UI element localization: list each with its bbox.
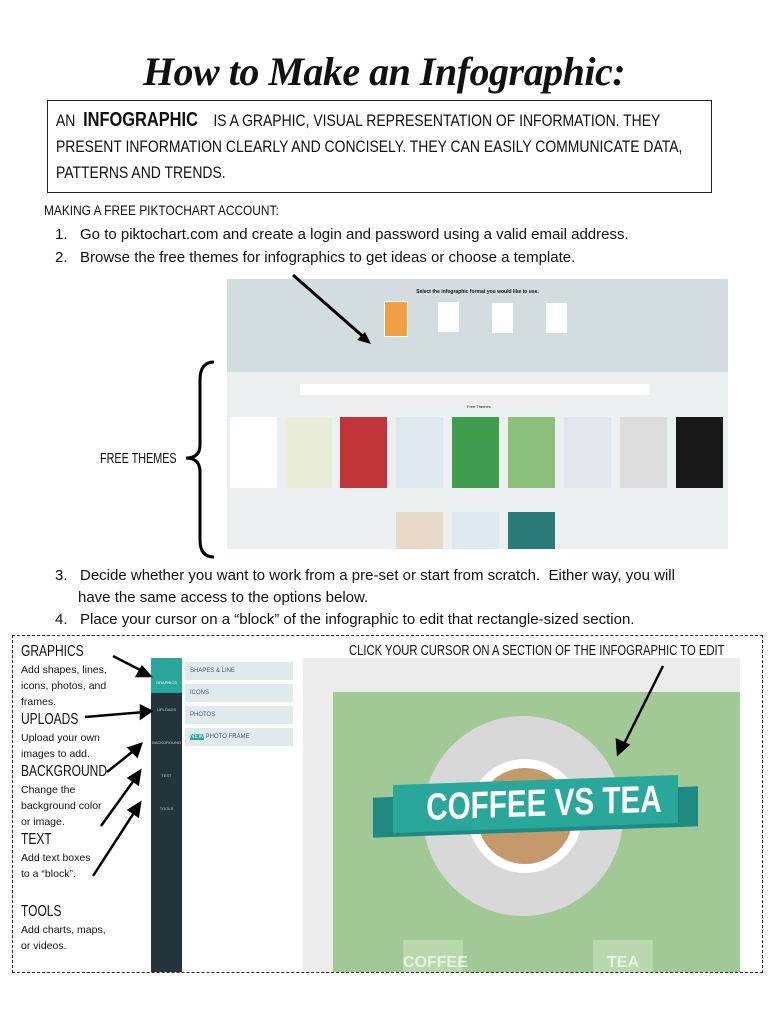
steps 3-4: 4. Place your cursor on a “block” of the infographic to edit that rectangle-sized section. — [55, 611, 634, 628]
tool descriptions: Add shapes, lines, — [21, 664, 107, 676]
arrow to infographic format — [292, 274, 371, 344]
editor canvas: TEA — [607, 954, 639, 971]
menu panel — [185, 662, 293, 746]
tool descriptions: TEXT — [21, 831, 52, 848]
menu panel: ICONS — [190, 690, 209, 696]
sidebar: TOOLS — [160, 806, 173, 811]
definition box — [47, 100, 712, 193]
menu panel: NEW PHOTO FRAME — [190, 734, 250, 740]
free themes label: FREE THEMES — [100, 450, 177, 467]
tool descriptions: or videos. — [21, 940, 67, 952]
bracket — [186, 360, 214, 558]
menu panel: SHAPES & LINE — [190, 668, 235, 674]
sidebar: UPLOADS — [157, 707, 176, 712]
sidebar — [151, 658, 182, 972]
steps 3-4: have the same access to the options below. — [78, 589, 368, 606]
title: How to Make an Infographic: — [143, 49, 625, 94]
tool descriptions: frames. — [21, 696, 56, 708]
tool descriptions: UPLOADS — [21, 711, 78, 728]
tool descriptions: Add text boxes — [21, 852, 90, 864]
screenshot: themes: Free Themes — [467, 404, 491, 409]
tool descriptions: images to add. — [21, 748, 90, 760]
tool descriptions: background color — [21, 800, 102, 812]
sidebar: BACKGROUND — [152, 740, 181, 745]
tool descriptions: icons, photos, and — [21, 680, 106, 692]
steps 1-2: 2. Browse the free themes for infographics to get ideas or choose a template. — [55, 249, 575, 266]
tool descriptions: or image. — [21, 816, 65, 828]
dashed panel: editor — [12, 635, 763, 973]
definition box: AN INFOGRAPHIC IS A GRAPHIC, VISUAL REPRESENTATION OF INFORMATION. THEY — [56, 109, 660, 131]
tool descriptions: Add charts, maps, — [21, 924, 106, 936]
tool descriptions: Upload your own — [21, 732, 100, 744]
editor canvas: COFFEE VS TEA — [426, 779, 662, 829]
tool descriptions: GRAPHICS — [21, 643, 84, 660]
click heading: CLICK YOUR CURSOR ON A SECTION OF THE INFOGRAPHIC TO EDIT — [349, 642, 724, 659]
section heading: MAKING A FREE PIKTOCHART ACCOUNT: — [44, 202, 279, 218]
tool descriptions: to a “block”. — [21, 868, 76, 880]
definition box: PATTERNS AND TRENDS. — [56, 163, 226, 182]
tool descriptions — [21, 643, 107, 952]
tool descriptions: Change the — [21, 784, 75, 796]
editor canvas: COFFEE — [403, 954, 468, 971]
menu panel: PHOTOS — [190, 712, 215, 718]
tool descriptions: TOOLS — [21, 903, 61, 920]
sidebar: TEXT — [161, 773, 172, 778]
arrows — [84, 654, 664, 877]
screenshot: themes — [227, 279, 728, 549]
steps 3-4: 3. Decide whether you want to work from a pre-set or start from scratch. Either way, you will — [55, 567, 675, 584]
screenshot: themes: Select the infographic format you would like to use. — [416, 289, 539, 295]
steps 3-4 — [55, 567, 675, 628]
tool descriptions: BACKGROUND — [21, 763, 107, 780]
sidebar: GRAPHICS — [156, 680, 177, 685]
steps 1-2 — [55, 226, 629, 266]
steps 1-2: 1. Go to piktochart.com and create a login and password using a valid email address. — [55, 226, 629, 243]
editor canvas — [303, 658, 740, 972]
definition box: PRESENT INFORMATION CLEARLY AND CONCISELY. THEY CAN EASILY COMMUNICATE DATA, — [56, 137, 682, 156]
